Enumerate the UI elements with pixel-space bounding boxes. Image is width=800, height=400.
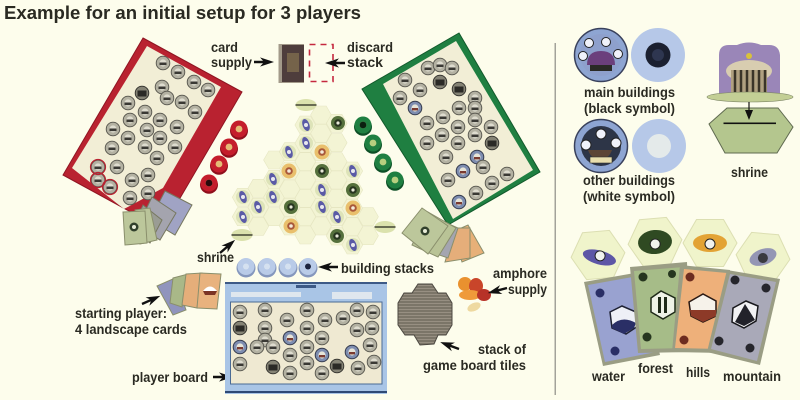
label: other buildings: (white symbol) bbox=[583, 189, 675, 204]
building stacks bbox=[236, 258, 318, 278]
other building token back bbox=[632, 119, 686, 173]
hills hex tile bbox=[683, 220, 737, 266]
forest card bbox=[630, 262, 690, 353]
other building token front bbox=[574, 120, 628, 172]
forest hex tile bbox=[626, 216, 684, 268]
label: shrine detail: shrine bbox=[731, 165, 768, 180]
label: other buildings bbox=[583, 173, 675, 204]
title: Example for an initial setup for 3 players bbox=[4, 3, 361, 23]
panel: green player board bbox=[362, 33, 540, 225]
red player discs bbox=[200, 120, 248, 194]
label: main buildings bbox=[584, 85, 675, 116]
main building token back bbox=[631, 28, 685, 82]
label: discard stack: stack bbox=[347, 55, 384, 70]
panel: red player board bbox=[63, 38, 242, 229]
label: discard stack: discard bbox=[347, 40, 393, 55]
mountain hex tile bbox=[734, 231, 792, 283]
arrow: stack of tiles bbox=[439, 338, 461, 353]
game board hex tiles bbox=[232, 106, 378, 254]
arrow: card supply bbox=[254, 57, 274, 67]
amphore supply pile bbox=[458, 277, 491, 314]
label: starting player: 4 landscape cards bbox=[75, 322, 187, 337]
label: amphore supply bbox=[493, 266, 547, 297]
arrow: discard stack bbox=[325, 58, 345, 68]
label: mountain: mountain bbox=[723, 369, 781, 384]
arrow: amphore supply bbox=[486, 284, 508, 298]
hills card bbox=[672, 265, 730, 353]
starting player cards bbox=[157, 273, 221, 315]
label: other buildings: other buildings bbox=[583, 173, 675, 188]
mountain card bbox=[707, 270, 780, 365]
divider bbox=[554, 43, 556, 395]
panel: blue player board bbox=[225, 282, 387, 394]
label: discard stack bbox=[347, 40, 393, 70]
arrow: player board bbox=[213, 372, 233, 382]
card supply bbox=[278, 44, 304, 83]
label: card supply bbox=[211, 40, 252, 70]
label: forest: forest bbox=[638, 361, 673, 376]
label: stack of game board tiles bbox=[423, 342, 526, 373]
red player hand cards bbox=[123, 191, 192, 245]
label: card supply: supply bbox=[211, 55, 252, 70]
label: player board: player board bbox=[132, 370, 208, 385]
label: stack of game board tiles: game board tiles bbox=[423, 358, 526, 373]
label: amphore supply: amphore bbox=[493, 266, 547, 281]
green player discs bbox=[354, 116, 404, 191]
main building token front bbox=[574, 28, 628, 82]
arrow: building stacks bbox=[318, 262, 338, 272]
label: main buildings: (black symbol) bbox=[584, 101, 675, 116]
discard stack bbox=[310, 44, 333, 82]
label: building stacks: building stacks bbox=[341, 261, 434, 276]
label: stack of game board tiles: stack of bbox=[478, 342, 526, 357]
label: card supply: card bbox=[211, 40, 238, 55]
shrine tokens on board bbox=[232, 99, 396, 241]
label: main buildings: main buildings bbox=[584, 85, 675, 100]
label: water: water bbox=[591, 369, 626, 384]
label: hills: hills bbox=[686, 365, 710, 380]
icon: shrine bbox=[707, 42, 793, 153]
label: shrine: shrine bbox=[197, 250, 234, 265]
stack of game board tiles bbox=[398, 284, 452, 345]
label: amphore supply: supply bbox=[508, 282, 547, 297]
arrow: starting player bbox=[140, 292, 162, 308]
label: starting player: starting player: bbox=[75, 306, 167, 321]
arrow: shrine bbox=[217, 236, 238, 256]
water hex tile bbox=[569, 229, 627, 281]
label: starting player bbox=[75, 306, 187, 337]
water card bbox=[584, 272, 660, 366]
green player hand cards bbox=[402, 208, 484, 262]
